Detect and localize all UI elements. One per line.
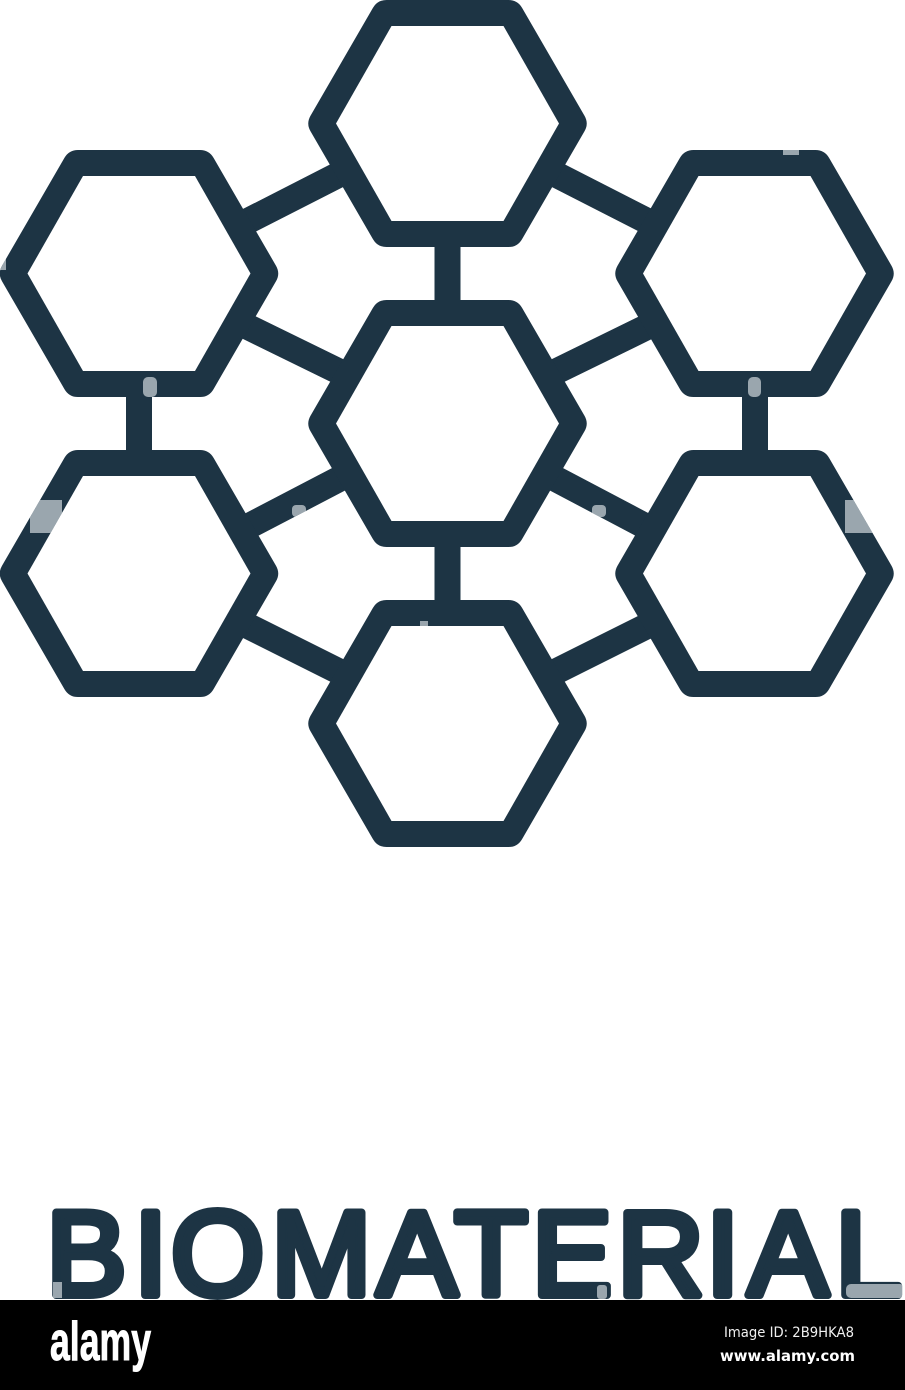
hexagon: lower right [615,450,894,697]
footer bar [0,1300,905,1390]
title: BIOMATERIAL [46,1187,902,1321]
hexagon: center [308,300,587,547]
hexagon: upper right [615,150,894,397]
connectors between hexagons [139,174,755,672]
footer image id: Image ID: 2B9HKA8 [724,1325,854,1341]
hexagon: bottom [308,600,587,847]
hexagon: upper left [0,150,278,397]
footer logo: alamy [50,1310,151,1372]
footer website: www.alamy.com [720,1347,855,1365]
hexagon: lower left [0,450,278,697]
hexagon: top [308,0,587,247]
icon: biomaterial hexagon network [0,0,894,847]
